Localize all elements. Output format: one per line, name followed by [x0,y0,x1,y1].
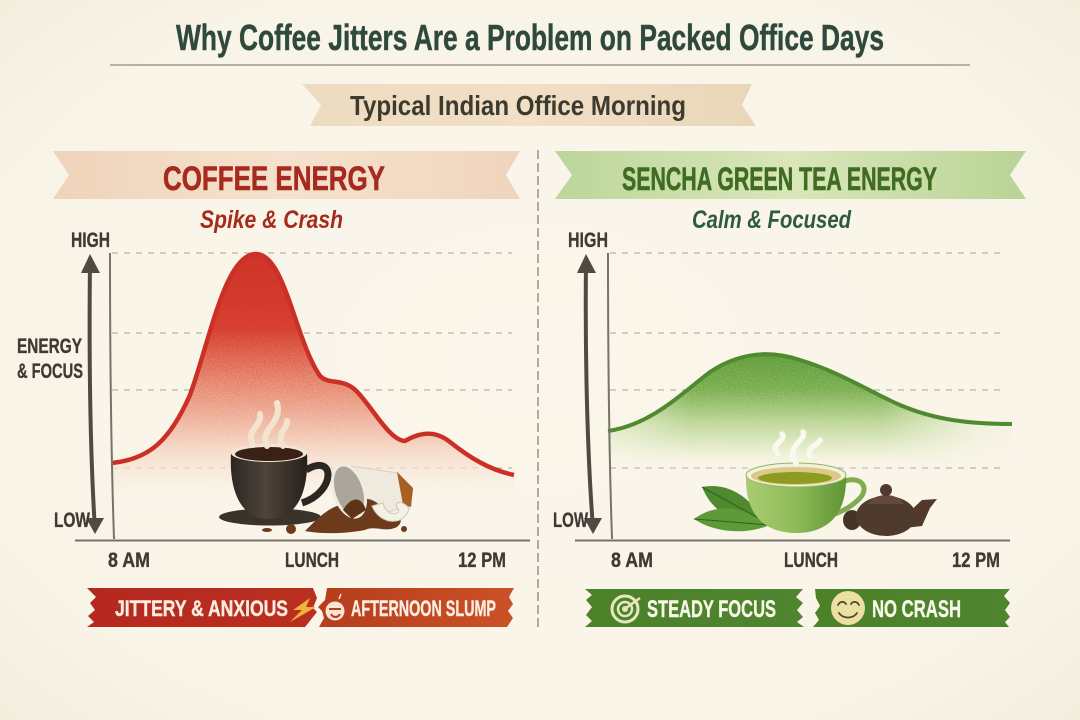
grid lines [112,253,512,468]
energy area [112,254,514,505]
panel divider [537,150,539,630]
icon: green tea cup [746,432,864,533]
tag: jittery and anxious: JITTERY & ANXIOUS [115,596,288,621]
tag: no crash: NO CRASH [872,596,961,623]
energy curve [608,354,1012,431]
coffee banner [53,151,520,199]
coffee subtitle: Spike & Crash [200,206,343,234]
tea chart: LOW [553,509,588,532]
panel: coffee energy [17,151,530,627]
subtitle ribbon [302,84,756,126]
tag: steady focus: STEADY FOCUS [647,596,776,623]
panel: sencha green tea energy [553,151,1026,627]
tea subtitle: Calm & Focused [692,206,852,234]
icon: spilled mug [262,461,413,534]
energy area [608,356,984,468]
icon: lightning bolt [290,598,316,622]
coffee chart: & FOCUS [17,360,83,383]
icon: coffee cup [219,403,328,526]
tea banner [555,151,1026,199]
icon: calm smiley [831,591,865,625]
coffee chart: LUNCH [285,549,339,572]
tag: afternoon slump [318,588,514,627]
coffee chart: 12 PM [458,549,506,572]
tag: no crash [813,589,1010,627]
icon: teapot [843,484,937,536]
energy curve [112,254,514,475]
tea chart: 12 PM [952,549,1000,572]
icon: tea leaves [694,486,770,531]
coffee chart [17,229,530,572]
axes [575,253,1010,540]
grid lines [610,253,1000,468]
icon: slump face [326,594,344,620]
vertical arrow [577,254,602,534]
axes [75,253,530,540]
coffee chart: LOW [54,509,90,532]
axis labels: HIGH [71,229,110,252]
tea chart: LUNCH [784,549,838,572]
icon: target [612,596,640,622]
coffee chart: ENERGY [17,335,82,358]
coffee banner: COFFEE ENERGY [163,160,385,198]
axis labels: HIGH [568,229,608,252]
tag: steady focus [585,589,804,627]
tea chart [553,229,1012,572]
tag: afternoon slump: AFTERNOON SLUMP [351,596,496,621]
coffee chart: 8 AM [108,549,150,572]
tag: jittery and anxious [87,588,317,627]
vertical arrow [81,254,104,534]
tea chart: 8 AM [611,549,653,572]
subtitle ribbon: Typical Indian Office Morning [350,90,686,121]
